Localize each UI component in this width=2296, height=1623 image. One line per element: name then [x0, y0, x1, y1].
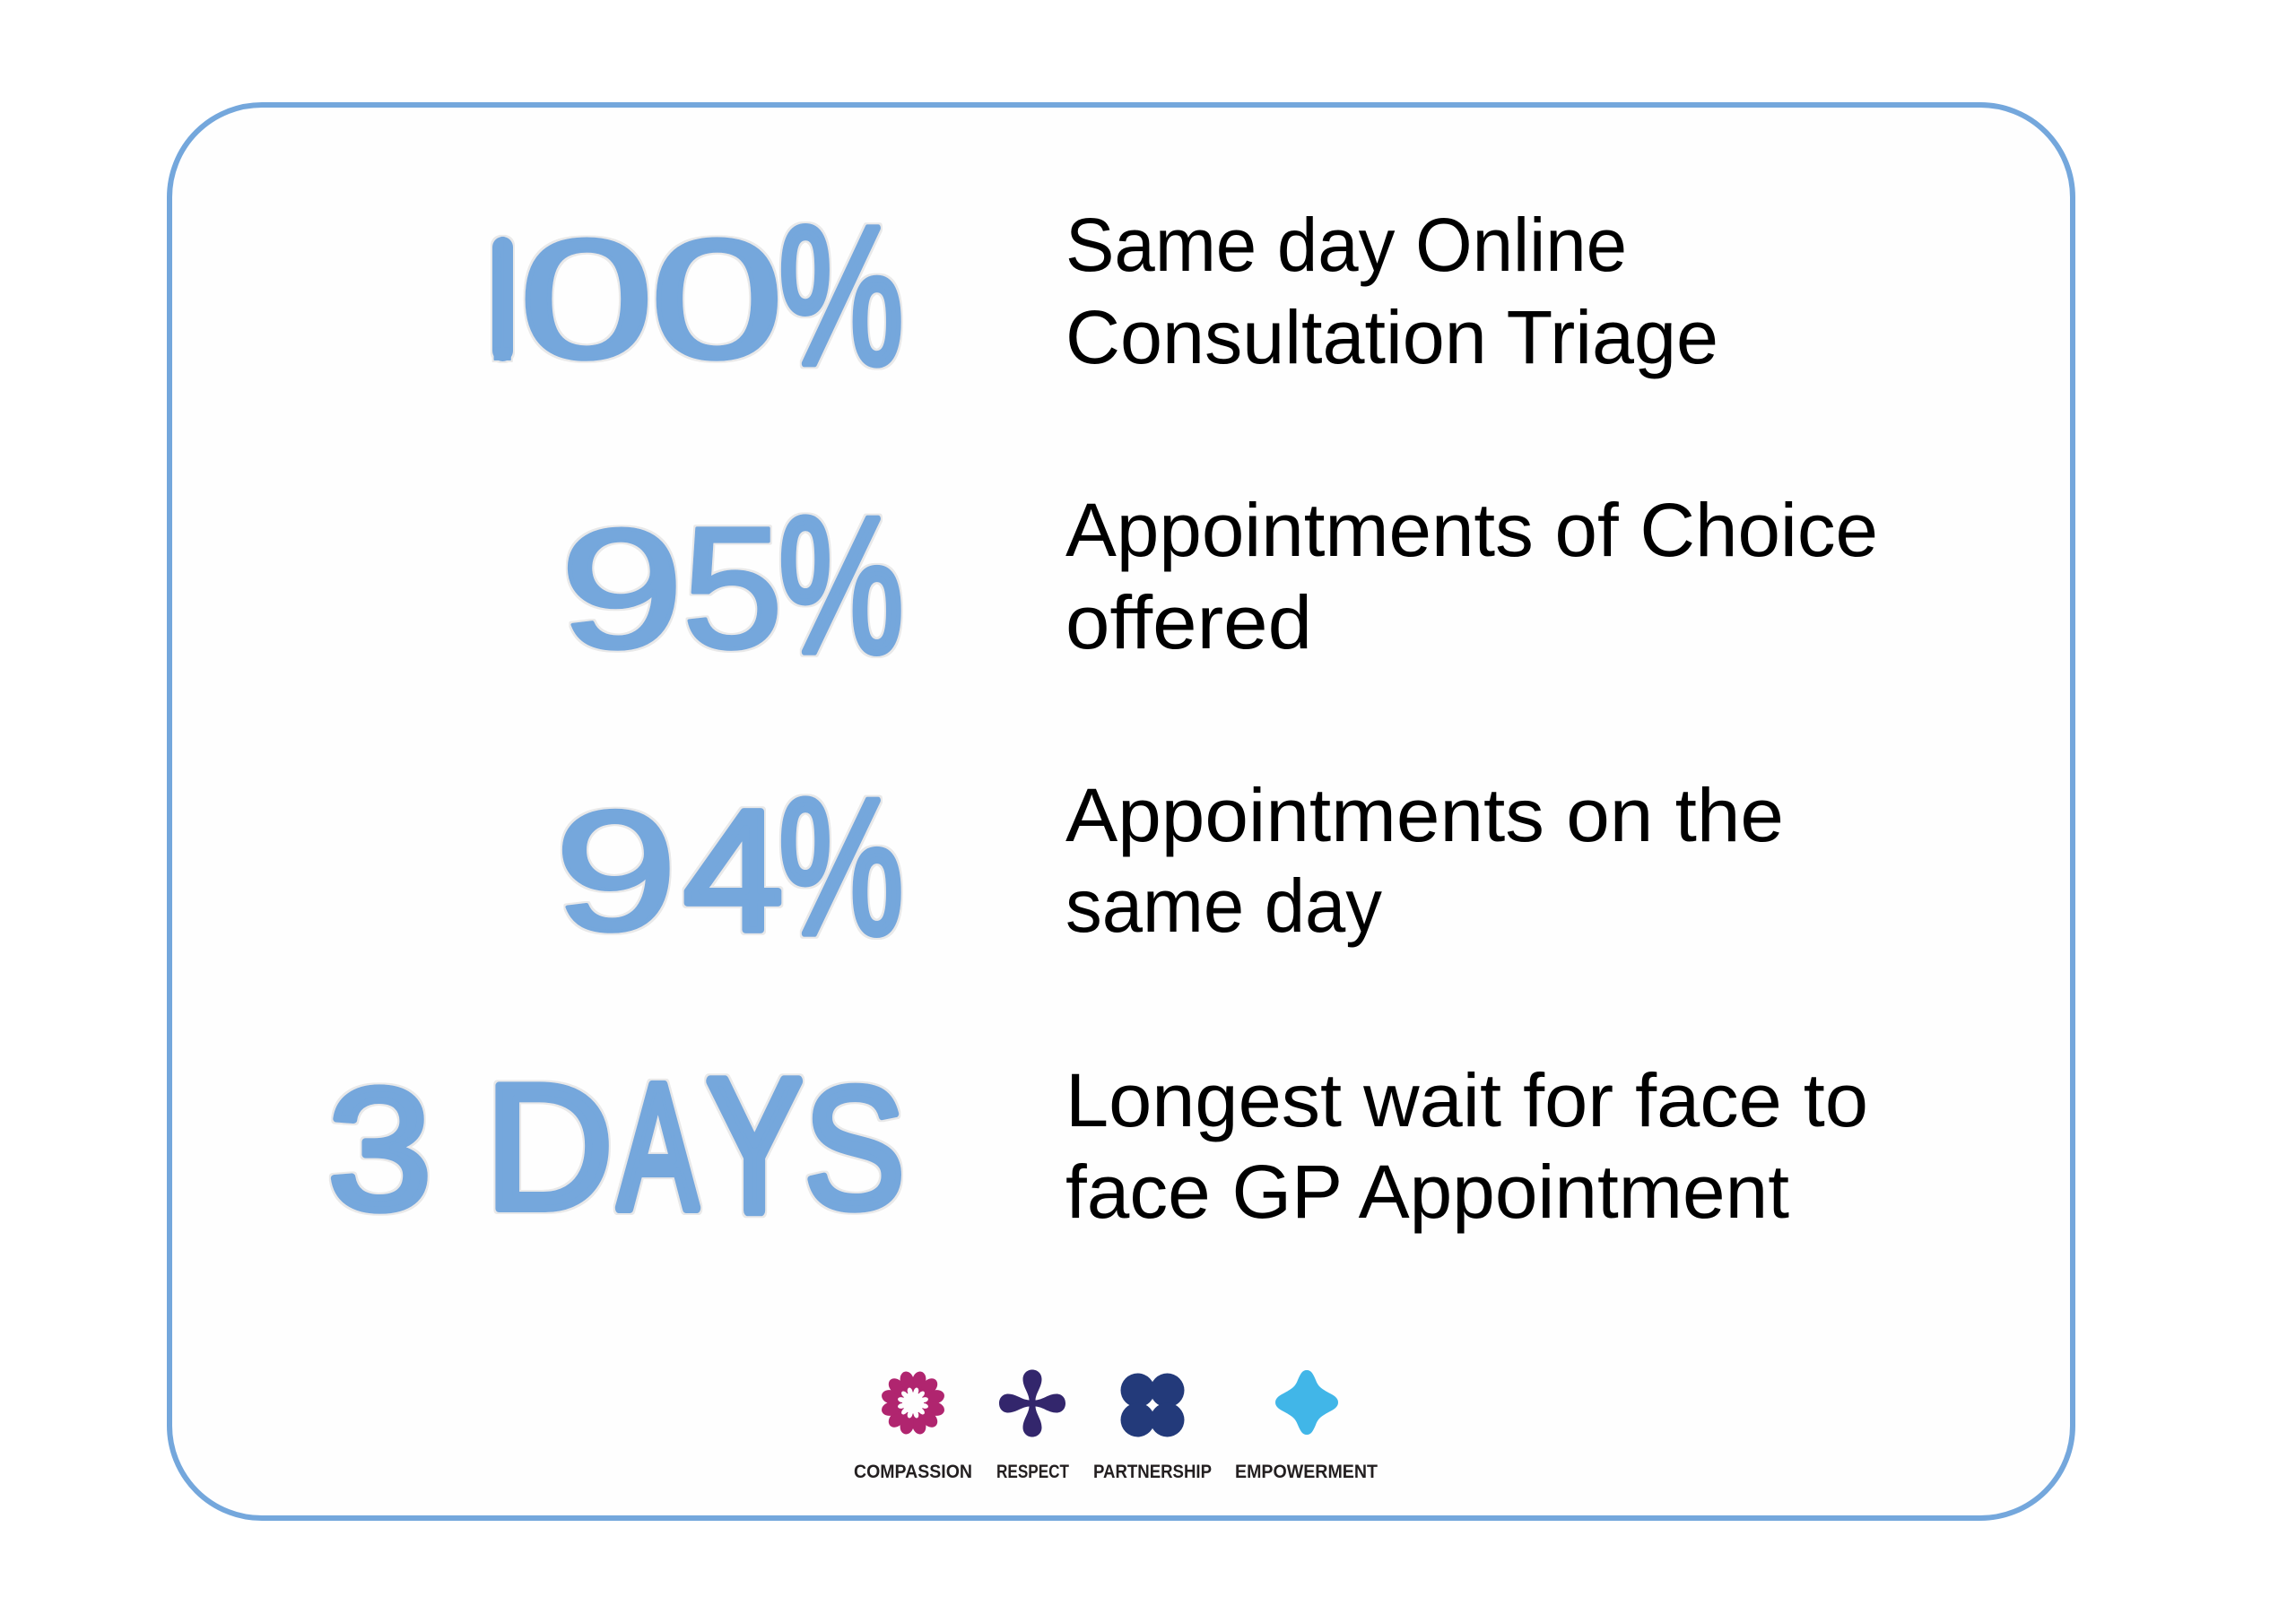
stat value: 94%: 4 — [683, 775, 783, 967]
description: same day online consultation triage: Consultation Triage — [1065, 295, 1718, 379]
stat value: 94%: 9 — [554, 775, 678, 966]
label: empowerment: EMPOWERMENT — [1235, 1462, 1378, 1482]
description: same day online consultation triage: Same day Online — [1065, 203, 1627, 287]
description: longest wait for face to face GP appointment: face GP Appointment — [1065, 1150, 1789, 1234]
stat value: 94%: % — [778, 759, 904, 976]
icon: respect cross — [999, 1370, 1065, 1436]
description: appointments on the same day — [1065, 773, 1784, 948]
stat value: 100%: % — [778, 187, 904, 406]
description: same day online consultation triage — [1065, 203, 1718, 379]
stat row: 100% same day triage — [491, 187, 1718, 406]
icon: partnership four lobes — [1121, 1374, 1184, 1436]
description: longest wait for face to face GP appointment — [1065, 1058, 1868, 1234]
stat value: 3 DAYS: 3 — [327, 1052, 432, 1245]
stat row: 94% appointments on the same day — [554, 759, 1784, 976]
stat value: 95%: 9 — [560, 494, 684, 684]
stat value: 3 DAYS: D — [484, 1047, 613, 1247]
stat value: 100% — [491, 187, 904, 406]
icon: compassion flower — [880, 1370, 946, 1436]
stat value: 100%: 0 — [649, 204, 785, 394]
description: appointments of choice offered: offered — [1065, 580, 1312, 664]
label: compassion: COMPASSION — [854, 1462, 972, 1482]
stat value: 3 DAYS — [327, 1041, 905, 1251]
description: appointments of choice offered: Appointments of Choice — [1065, 488, 1878, 572]
stat value: 95%: 5 — [682, 491, 783, 684]
description: longest wait for face to face GP appointment: Longest wait for face to — [1065, 1058, 1868, 1142]
description: appointments on the same day: same day — [1065, 864, 1382, 948]
stat value: 3 DAYS: Y — [707, 1041, 802, 1251]
stat value: 100%: 0 — [518, 204, 655, 394]
stat row: 95% appointments of choice — [560, 478, 1878, 694]
stat value: 3 DAYS: S — [804, 1051, 905, 1245]
values legend — [854, 1370, 1378, 1482]
description: appointments on the same day: Appointments on the — [1065, 773, 1784, 857]
stat value: 95%: % — [778, 478, 904, 694]
stat value: 100%: 1 — [491, 200, 513, 395]
stat value: 94% — [554, 759, 904, 976]
panel: rounded border — [170, 105, 2073, 1518]
label: partnership: PARTNERSHIP — [1093, 1462, 1212, 1482]
stat row: 3 days longest wait — [327, 1041, 1868, 1251]
label: respect: RESPECT — [996, 1462, 1069, 1482]
stat value: 95% — [560, 478, 904, 694]
stat value: 3 DAYS: A — [619, 1047, 698, 1245]
icon: empowerment star — [1275, 1370, 1338, 1435]
description: appointments of choice offered — [1065, 488, 1878, 664]
